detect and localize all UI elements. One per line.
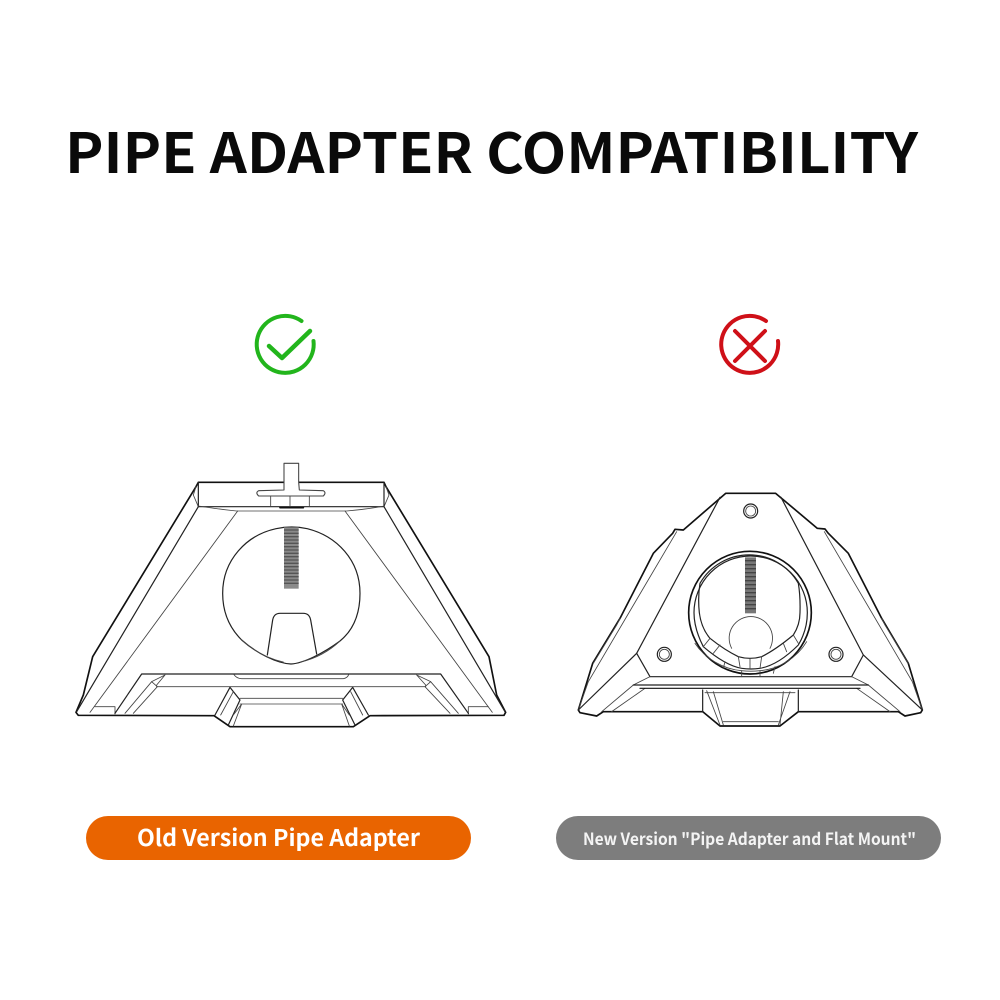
pipe saddle tab: [267, 613, 317, 655]
pipe ring: [689, 551, 811, 677]
mounting bolt head: [257, 463, 325, 508]
new version pipe adapter and flat mount drawing: [578, 493, 922, 726]
threaded bolt: [745, 557, 756, 613]
new version label pill: [556, 816, 941, 860]
icon: red cross: [721, 316, 778, 373]
pipe saddle dome: [729, 617, 772, 648]
mounting holes: [657, 504, 843, 661]
pipe opening: [223, 527, 360, 664]
title: PIPE ADAPTER COMPATIBILITY: [65, 109, 919, 189]
new version label pill: New Version "Pipe Adapter and Flat Mount": [583, 826, 916, 850]
old version pipe adapter drawing: [76, 463, 506, 727]
icon: green check: [257, 316, 314, 373]
old version label pill: Old Version Pipe Adapter: [137, 819, 421, 853]
threaded bolt: [284, 527, 299, 589]
center foot: [703, 690, 798, 725]
old version label pill: [86, 816, 471, 860]
adapter outer body: [578, 493, 922, 726]
adapter side and top bevels: [77, 482, 505, 714]
lower frame: [115, 674, 468, 726]
adapter face and side bevels: [578, 497, 922, 712]
adapter outer body: [76, 482, 506, 727]
